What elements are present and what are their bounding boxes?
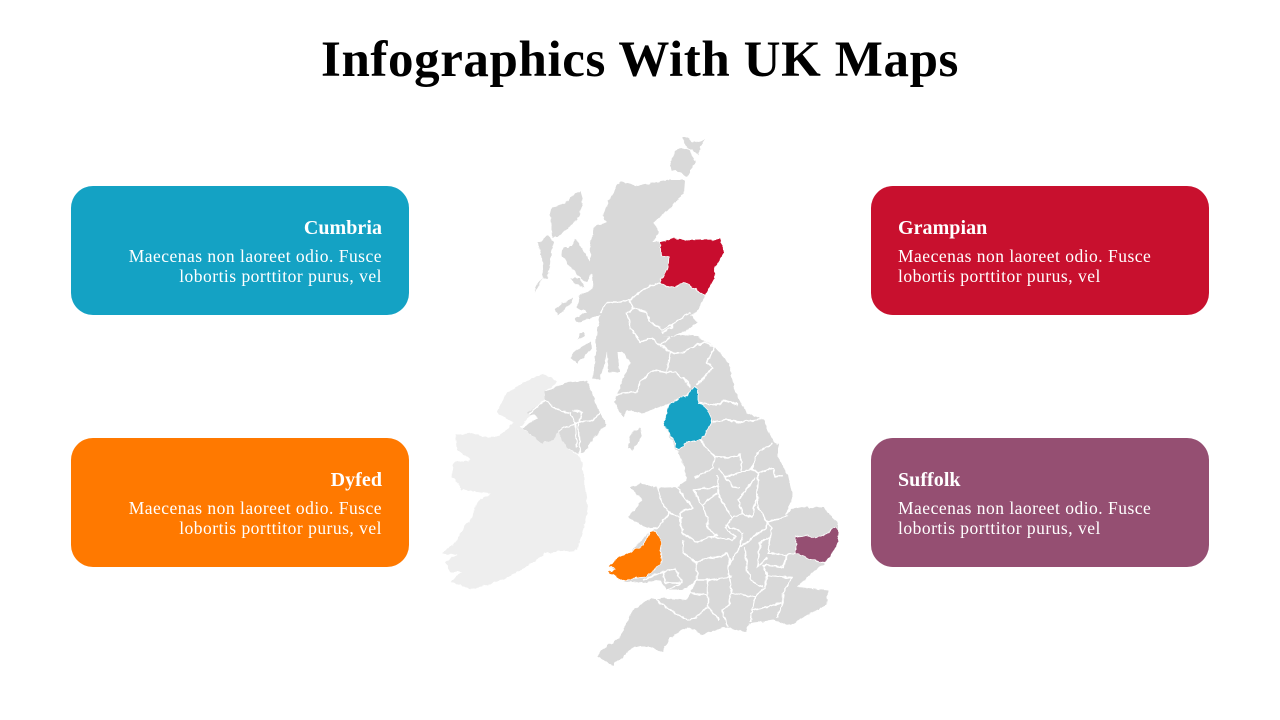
text: Suffolk description <box>898 498 1151 538</box>
text: Grampian description: Maecenas non laoreet odio. Fusce <box>898 246 1151 266</box>
heading: Suffolk: Suffolk <box>898 469 961 491</box>
text: Suffolk description: Maecenas non laoreet odio. Fusce <box>898 498 1151 518</box>
islands: Shetland and Orkney <box>670 137 705 177</box>
text: Cumbria description: Maecenas non laoreet odio. Fusce <box>129 246 382 266</box>
heading: Cumbria: Cumbria <box>304 217 382 239</box>
text: Dyfed description: lobortis porttitor purus, vel <box>179 518 382 538</box>
text: Grampian description <box>898 246 1151 286</box>
text: Cumbria description <box>129 246 382 286</box>
island: Isle of Man <box>627 428 642 450</box>
panel: Suffolk <box>871 438 1209 567</box>
title: Infographics With UK Maps <box>321 32 959 88</box>
region: Northern Ireland <box>522 380 607 453</box>
text: Cumbria description: lobortis porttitor purus, vel <box>179 266 382 286</box>
region: Dyfed highlighted <box>608 532 662 581</box>
region: Grampian highlighted <box>660 238 725 296</box>
panel: Grampian <box>871 186 1209 315</box>
region: Suffolk highlighted <box>795 527 839 563</box>
mainland <box>575 180 838 665</box>
county borders <box>520 283 797 627</box>
text: Dyfed description: Maecenas non laoreet odio. Fusce <box>129 498 382 518</box>
region: Cumbria highlighted <box>663 386 712 450</box>
text: Dyfed description <box>129 498 382 538</box>
region: Great Britain and Northern Ireland <box>522 137 838 665</box>
text: Suffolk description: lobortis porttitor purus, vel <box>898 518 1101 538</box>
heading: Grampian: Grampian <box>898 217 987 239</box>
text: Grampian description: lobortis porttitor purus, vel <box>898 266 1101 286</box>
islands: Hebrides <box>534 190 618 373</box>
panel: Dyfed <box>71 438 409 567</box>
heading: Dyfed: Dyfed <box>331 469 382 491</box>
region: Republic of Ireland <box>442 373 588 589</box>
panel: Cumbria <box>71 186 409 315</box>
